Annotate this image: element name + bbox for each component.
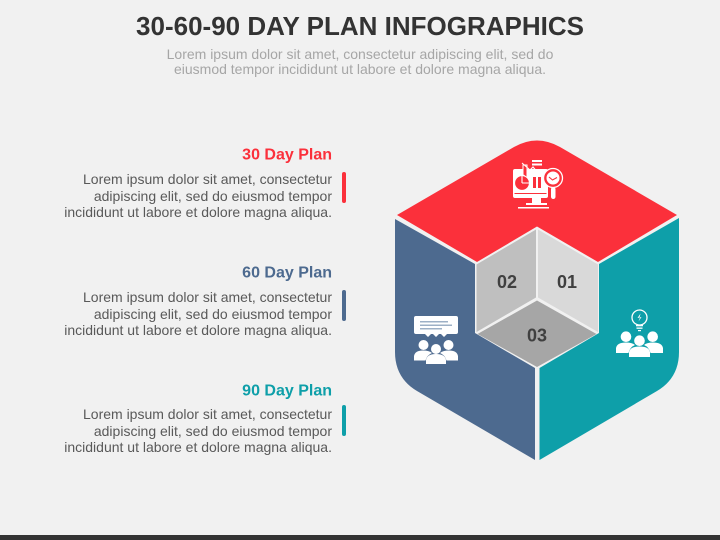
panel: 90 day plan text: [64, 382, 346, 455]
text block: 90 day plan: adipiscing elit, sed do eiusmod tempor: [94, 422, 332, 438]
heading: 90 day plan: 90 Day Plan: [242, 382, 332, 400]
panel: 30 day plan text: [64, 146, 346, 220]
heading: 30 day plan: 30 Day Plan: [242, 146, 332, 164]
accent bar: red: [342, 172, 346, 203]
icon: team with speech bubble: [414, 316, 458, 364]
text block: 30 day plan: incididunt ut labore et dolore magna aliqua.: [64, 204, 332, 220]
accent bar: blue: [342, 290, 346, 321]
text block: 60 day plan: incididunt ut labore et dolore magna aliqua.: [64, 322, 332, 338]
text block: 60 day plan: adipiscing elit, sed do eiusmod tempor: [94, 306, 332, 322]
panel: red top segment: [397, 140, 677, 262]
heading: 60 day plan: 60 Day Plan: [242, 264, 332, 282]
panel: blue left segment: [395, 219, 535, 460]
accent bar: teal: [342, 405, 346, 436]
subtitle: Lorem ipsum dolor sit amet, consectetur adipiscing elit, sed do: [167, 46, 553, 62]
footer bar: [0, 535, 720, 540]
label: 01: 01: [557, 272, 577, 292]
text block: 30 day plan: Lorem ipsum dolor sit amet, consectetur: [83, 171, 332, 187]
label: 03: 03: [527, 326, 547, 346]
hexagon diagram: [395, 140, 679, 460]
title: 30-60-90 DAY PLAN INFOGRAPHICS: [136, 11, 584, 41]
text block: 60 day plan: Lorem ipsum dolor sit amet, consectetur: [83, 289, 332, 305]
text block: 30 day plan: adipiscing elit, sed do eiusmod tempor: [94, 188, 332, 204]
panel: 01 face: [538, 230, 598, 332]
panel: 02 face: [476, 230, 536, 332]
text block: 60 day plan: [64, 289, 332, 338]
panel: 03 face: [478, 300, 596, 367]
icon: monitor with charts and magnifier: [513, 160, 562, 208]
label: 02: 02: [497, 272, 517, 292]
panel: 60 day plan text: [64, 264, 346, 338]
text block: 30 day plan: [64, 171, 332, 220]
text block: 90 day plan: incididunt ut labore et dolore magna aliqua.: [64, 439, 332, 455]
subtitle: eiusmod tempor incididunt ut labore et dolore magna aliqua.: [174, 61, 546, 77]
text block: 90 day plan: [64, 406, 332, 455]
icon: team with light bulb: [616, 310, 663, 357]
panel: teal right segment: [540, 218, 679, 460]
subtitle: [167, 46, 553, 77]
text block: 90 day plan: Lorem ipsum dolor sit amet, consectetur: [83, 406, 332, 422]
